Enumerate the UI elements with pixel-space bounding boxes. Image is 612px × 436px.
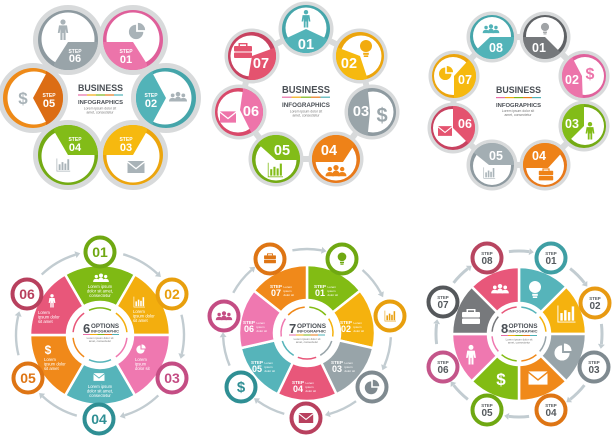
circle 01	[278, 2, 334, 56]
centre title: OPTIONS	[508, 323, 538, 330]
heading	[78, 82, 123, 114]
segment labels: STEP	[251, 360, 263, 365]
segment icons	[45, 273, 146, 381]
step node labels: STEP	[545, 251, 557, 256]
numbers: 01	[298, 37, 314, 53]
numbers: 05	[274, 143, 290, 159]
segment labels: Lorem	[264, 361, 274, 365]
heading: amet, consectetur	[505, 113, 532, 117]
circle 02	[558, 50, 610, 101]
segment labels: ipsum	[264, 365, 273, 369]
step 01 circle	[100, 5, 168, 75]
centre title: Lorem ipsum dolor sit	[87, 336, 114, 340]
segments, inner arcs and arrows	[0, 242, 200, 428]
icon nodes: $	[237, 379, 246, 396]
segment text: ipsum dolor	[133, 314, 155, 318]
numbers: 05	[489, 149, 503, 163]
numbered nodes: 06	[19, 286, 35, 302]
centre title: INFOGRAPHIC	[508, 330, 538, 334]
segment text: ipsum	[135, 362, 147, 366]
centre title: amet, consectetur	[508, 340, 530, 344]
segment labels: dolor sit	[284, 293, 294, 297]
segment labels: Lorem	[284, 285, 293, 289]
circle 06	[428, 102, 478, 154]
step labels: 04	[69, 142, 82, 154]
numbers: 01	[532, 41, 546, 55]
segment labels: STEP	[292, 380, 304, 385]
numbers: 02	[341, 56, 357, 72]
segment labels: 01	[315, 288, 325, 298]
segment text: Lorem	[44, 357, 56, 362]
step node labels: 03	[588, 365, 600, 376]
segment labels: STEP	[331, 360, 343, 365]
segment labels: dolor sit	[306, 389, 316, 393]
segment text: sit amet	[44, 366, 59, 371]
circle 04	[520, 140, 570, 190]
numbered nodes: 04	[91, 411, 107, 427]
segment labels: Lorem	[256, 321, 266, 325]
circle 03	[558, 101, 610, 152]
step node labels: STEP	[481, 403, 493, 408]
circle 04	[306, 129, 364, 186]
step node labels: 07	[437, 300, 449, 311]
segment labels: STEP	[340, 320, 352, 325]
numbers	[243, 37, 369, 159]
segment icons: $	[45, 343, 52, 357]
heading: BUSINESS	[282, 85, 330, 96]
numbered nodes	[12, 238, 186, 434]
step labels: STEP	[42, 93, 56, 99]
segment icons: $	[496, 370, 506, 389]
segment labels: dolor sit	[344, 369, 355, 373]
segment labels: 05	[252, 364, 262, 374]
segments, inner arcs and arrows	[433, 248, 605, 420]
step labels: STEP	[68, 137, 82, 143]
segment text: sit amet	[133, 318, 148, 323]
circle 08	[466, 12, 518, 62]
segment labels: 07	[271, 288, 281, 298]
icons	[220, 10, 388, 177]
centre title: Lorem ipsum dolor sit	[506, 338, 533, 342]
segment text: dolor sit	[135, 366, 150, 371]
step nodes	[428, 244, 610, 424]
numbered nodes: 03	[164, 370, 180, 386]
centre title	[83, 321, 120, 343]
segment labels: STEP	[243, 320, 255, 325]
step labels: STEP	[119, 137, 133, 143]
step labels: STEP	[144, 93, 158, 99]
step labels: STEP	[119, 49, 133, 55]
segment labels: 04	[293, 384, 303, 394]
step node labels: 08	[481, 256, 493, 267]
segment labels: dolor sit	[256, 329, 267, 333]
heading: INFOGRAPHICS	[496, 103, 541, 109]
segment text: Lorem	[38, 310, 50, 315]
heading	[496, 84, 541, 117]
heading: Lorem ipsum dolor sit	[84, 106, 116, 110]
segment text: Lorem ipsum	[88, 384, 113, 389]
segment labels: dolor sit	[328, 293, 338, 297]
circle 07	[224, 28, 282, 86]
numbers: 06	[243, 104, 259, 120]
step node labels: STEP	[481, 251, 493, 256]
step node labels: STEP	[589, 296, 601, 301]
segment labels: 03	[332, 364, 342, 374]
segment labels: ipsum	[306, 385, 314, 389]
step labels: 02	[145, 98, 157, 110]
numbered nodes: 01	[92, 244, 108, 260]
numbers: 07	[458, 73, 472, 87]
segment labels: Lorem	[306, 381, 315, 385]
numbers: 02	[565, 73, 579, 87]
centre title: Lorem ipsum dolor sit	[294, 337, 321, 341]
centre title: 6	[83, 321, 90, 336]
centre title: 7	[289, 321, 296, 336]
icon nodes	[210, 244, 404, 432]
circle 05	[466, 140, 518, 190]
segment labels: dolor sit	[264, 369, 275, 373]
step 04 circle	[33, 120, 100, 190]
numbers: 03	[353, 104, 369, 120]
icons	[438, 23, 595, 180]
centre title: INFOGRAPHIC	[297, 330, 326, 334]
step node labels: STEP	[437, 295, 449, 300]
panel: 8 options wheel	[428, 244, 610, 424]
step labels: 03	[120, 142, 132, 154]
panel: six step circles	[0, 5, 201, 190]
segment text: dolor sit amet,	[87, 388, 113, 394]
heading: BUSINESS	[496, 84, 541, 95]
circle 01	[520, 12, 570, 62]
circle 06	[212, 84, 266, 140]
connector ring	[453, 37, 584, 165]
segment labels	[243, 284, 364, 394]
segment labels: Lorem	[328, 285, 337, 289]
segment text: Lorem ipsum	[88, 284, 113, 289]
connector ring	[239, 29, 372, 159]
segment labels: STEP	[314, 284, 326, 289]
segment labels: dolor sit	[354, 329, 364, 333]
step node labels: 05	[481, 408, 493, 419]
segment text: Lorem	[135, 357, 147, 362]
step 02 circle	[131, 63, 201, 133]
heading: INFOGRAPHICS	[78, 100, 123, 106]
heading: INFOGRAPHICS	[282, 103, 330, 109]
centre title: 8	[501, 321, 508, 336]
heading: Lorem ipsum dolor sit	[290, 110, 322, 114]
circle 02	[332, 28, 388, 84]
step labels	[42, 49, 158, 154]
step 05 circle	[0, 63, 68, 133]
step labels: STEP	[68, 49, 82, 55]
numbers	[458, 41, 579, 163]
centre title: OPTIONS	[297, 323, 327, 330]
segment labels: 02	[341, 324, 351, 334]
step node labels	[437, 251, 601, 419]
segment text	[38, 284, 155, 398]
circle 07	[428, 50, 480, 102]
segment labels: STEP	[270, 284, 282, 289]
numbers: 03	[565, 117, 579, 131]
segment text: dolor sit amet,	[87, 288, 113, 294]
panel: eight numbered circles	[428, 12, 610, 190]
segments, inner arcs and arrows	[219, 247, 394, 419]
segment text: ipsum dolor	[38, 314, 60, 320]
centre title	[501, 321, 538, 344]
numbers: 06	[458, 117, 472, 131]
panel: 6 options wheel	[0, 238, 200, 434]
step node labels: 01	[545, 256, 557, 267]
heading: BUSINESS	[78, 82, 123, 93]
heading: amet, consectetur	[87, 110, 114, 114]
step 03 circle	[100, 120, 168, 190]
panel: 7 options wheel	[210, 244, 404, 432]
segment labels: ipsum	[256, 325, 265, 329]
icons: $	[586, 66, 595, 83]
heading: Lorem ipsum dolor sit	[502, 109, 534, 113]
centre title: amet, consectetur	[89, 339, 111, 343]
step labels: 06	[69, 53, 81, 65]
segment text: consectetur	[89, 393, 111, 398]
heading	[282, 85, 330, 118]
segment labels: ipsum	[328, 289, 336, 293]
numbers: 07	[253, 56, 269, 72]
segment text: Lorem	[133, 309, 145, 314]
segment text: sit amet	[38, 319, 53, 324]
segment labels: Lorem	[354, 321, 363, 325]
numbers: 04	[532, 149, 546, 163]
circle 05	[248, 129, 306, 186]
segment labels: ipsum	[354, 325, 362, 329]
segment text: ipsum dolor	[44, 362, 66, 366]
numbered nodes: 02	[164, 286, 180, 302]
step node labels: 06	[437, 365, 449, 376]
segment labels: ipsum	[344, 365, 353, 369]
centre title: amet, consectetur	[296, 340, 318, 344]
heading: amet, consectetur	[293, 114, 320, 118]
icons: $	[376, 105, 388, 127]
numbered nodes: 05	[20, 370, 36, 386]
numbers: 08	[489, 41, 503, 55]
centre title: INFOGRAPHIC	[91, 330, 119, 334]
step labels: 01	[120, 54, 132, 66]
numbers: 04	[321, 143, 337, 159]
icons: $	[18, 89, 28, 108]
centre title	[289, 321, 327, 344]
step node labels: 04	[545, 408, 557, 419]
segment icons	[462, 281, 576, 389]
segment labels: ipsum	[284, 289, 292, 293]
circle 03	[344, 84, 400, 140]
step 06 circle	[33, 5, 100, 75]
segment labels: 06	[244, 324, 254, 334]
icons	[18, 19, 187, 173]
segment text: consectetur	[89, 293, 111, 298]
segment labels: Lorem	[344, 361, 354, 365]
step node labels: STEP	[437, 360, 449, 365]
step labels: 05	[43, 98, 55, 110]
step node labels: 02	[589, 301, 601, 312]
step node labels: STEP	[545, 403, 557, 408]
step node labels: STEP	[588, 360, 600, 365]
panel: seven numbered circles	[212, 2, 400, 186]
centre title: OPTIONS	[91, 323, 120, 330]
